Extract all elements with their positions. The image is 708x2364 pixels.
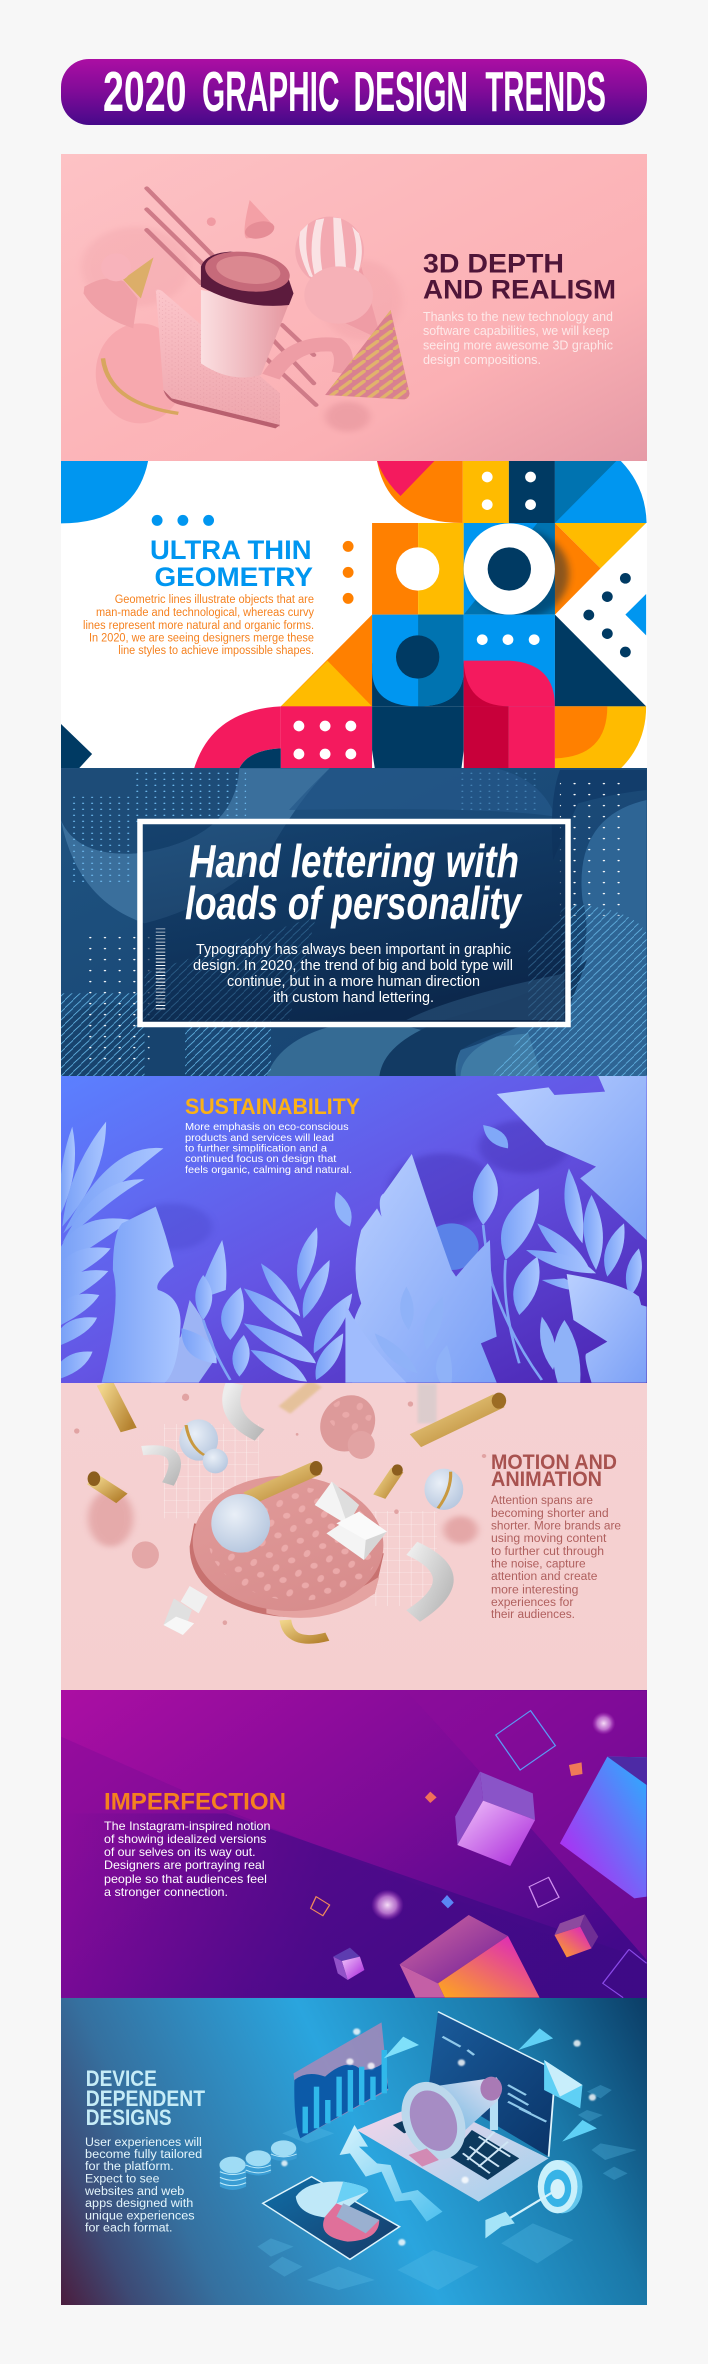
heading: 3D DEPTH [423, 248, 564, 278]
body text: In 2020, we are seeing designers merge these [89, 632, 314, 644]
cup body [201, 290, 289, 377]
heading [152, 540, 312, 586]
heading [185, 835, 523, 929]
body text: apps designed with [85, 2198, 193, 2210]
panel: imperfection [61, 1690, 647, 1998]
body text: websites and web [84, 2186, 184, 2198]
body text: Designers are portraying real [104, 1858, 265, 1872]
title: GRAPHIC [202, 60, 340, 124]
coins [219, 2140, 297, 2190]
panel background [61, 1690, 647, 1998]
body text: becoming shorter and [491, 1508, 609, 1520]
body text: design compositions. [423, 353, 541, 367]
panel background [61, 154, 647, 461]
heading: GEOMETRY [154, 562, 313, 592]
panel: hand lettering [61, 768, 647, 1077]
body text: The Instagram-inspired notion [104, 1819, 270, 1833]
body text: unique experiences [85, 2210, 195, 2222]
heading: AND REALISM [423, 274, 616, 304]
illustration: 3D coffee cup and shapes [81, 188, 410, 432]
small cone [244, 200, 275, 238]
title: DESIGN [354, 60, 468, 124]
body text: to further cut through [491, 1546, 604, 1558]
panel background [61, 1383, 647, 1690]
body text: lines represent more natural and organic forms. [83, 620, 314, 632]
left cone with ball [123, 257, 154, 298]
body text: attention and create [491, 1571, 597, 1583]
text frame [140, 821, 568, 1024]
frame border [140, 822, 568, 1024]
hatch inside frame [144, 910, 564, 1020]
sticks [147, 188, 316, 405]
heading: DEPENDENT [86, 2086, 205, 2111]
body text: Typography has always been important in graphic [196, 942, 511, 958]
body text: man-made and technological, whereas curvy [96, 607, 314, 619]
phone with pie chart [263, 2177, 400, 2259]
dart [501, 2190, 556, 2223]
panel background [61, 1076, 647, 1383]
title pill [61, 59, 647, 125]
panel: motion and animation [61, 1383, 647, 1690]
white dot grid right [560, 782, 621, 916]
heading [424, 254, 614, 299]
heading: Hand lettering with [189, 835, 519, 887]
body text: seeing more awesome 3D graphic [423, 338, 613, 352]
envelope [544, 2060, 582, 2108]
striped sphere [295, 217, 364, 285]
cubes [315, 1482, 359, 1525]
title banner [61, 59, 647, 125]
body text: for each format. [85, 2222, 172, 2234]
body text: of our selves on its way out. [104, 1845, 256, 1859]
body text: the noise, capture [491, 1558, 586, 1570]
frame fill [140, 821, 568, 1024]
body text: line styles to achieve impossible shapes. [118, 645, 314, 657]
body text: people so that audiences feel [104, 1872, 267, 1886]
panel: device dependent designs [61, 1998, 647, 2305]
body text [193, 942, 513, 1006]
panel: ultra thin geometry [61, 461, 647, 768]
body text: shorter. More brands are [491, 1520, 621, 1532]
heading [86, 2066, 205, 2130]
body text [423, 310, 613, 367]
body text: for the platform. [85, 2161, 174, 2173]
heading: DESIGNS [86, 2105, 172, 2130]
body text: more interesting [491, 1584, 578, 1596]
body text [491, 1495, 621, 1621]
body text: Thanks to the new technology and [423, 310, 613, 324]
illustration: floating 3D objects [74, 1383, 506, 1639]
panel background [61, 768, 647, 1076]
panel: sustainability [60, 1076, 647, 1383]
white dot grid left [89, 936, 150, 1060]
striped triangle [325, 310, 410, 399]
body text: to further simplification and a [185, 1142, 327, 1154]
body text: continue, but in a more human direction [227, 974, 480, 990]
heading: IMPERFECTION [104, 1788, 286, 1816]
heading: MOTION AND [491, 1451, 617, 1474]
barcode decoration [156, 928, 165, 1009]
body text: ith custom hand lettering. [273, 990, 434, 1006]
cup lid [201, 252, 293, 306]
body text: become fully tailored [85, 2149, 202, 2161]
body text: using moving content [491, 1533, 607, 1545]
megaphone [420, 2077, 501, 2147]
body text: continued focus on design that [185, 1153, 336, 1165]
chart panel [293, 2022, 388, 2138]
blob with gold ring [96, 324, 175, 424]
speckled triangle [156, 290, 280, 427]
body text: experiences for [491, 1597, 574, 1609]
heading: SUSTAINABILITY [185, 1094, 360, 1119]
right cone [346, 267, 378, 335]
illustration: isometric laptop and devices [219, 2012, 637, 2290]
arch [271, 344, 343, 377]
body text [83, 594, 314, 657]
body text: Attention spans are [491, 1495, 593, 1507]
body text: their audiences. [491, 1609, 575, 1621]
body text: design. In 2020, the trend of big and bold type will [193, 958, 513, 974]
panel background [61, 1998, 647, 2305]
body text: User experiences will [85, 2137, 202, 2149]
body text: Expect to see [85, 2174, 159, 2186]
body text: More emphasis on eco-conscious [185, 1121, 349, 1133]
body text: products and services will lead [185, 1132, 334, 1144]
heading: ANIMATION [491, 1468, 602, 1491]
body text: Geometric lines illustrate objects that are [115, 594, 314, 606]
body text: of showing idealized versions [104, 1832, 266, 1846]
organic background waves [61, 768, 647, 1077]
target [542, 2160, 582, 2213]
title: 2020 [103, 60, 186, 124]
body text: software capabilities, we will keep [423, 324, 610, 338]
body text [185, 1121, 352, 1176]
illustration: floating cubes [61, 1691, 647, 1998]
body text: a stronger connection. [104, 1885, 228, 1899]
panel: 3D depth and realism [61, 154, 647, 461]
body text: feels organic, calming and natural. [185, 1164, 352, 1176]
heading: DEVICE [86, 2066, 157, 2091]
zigzag arrow [340, 2125, 442, 2222]
heading [491, 1451, 617, 1491]
panel background [61, 461, 647, 768]
disc [190, 1523, 384, 1617]
body text [104, 1819, 270, 1899]
laptop [429, 2012, 555, 2157]
heading: ULTRA THIN [150, 535, 312, 565]
body text [84, 2137, 202, 2234]
illustration: geometric tiles [61, 461, 647, 768]
illustration: paper leaves [60, 1076, 647, 1383]
heading: loads of personality [185, 877, 523, 929]
